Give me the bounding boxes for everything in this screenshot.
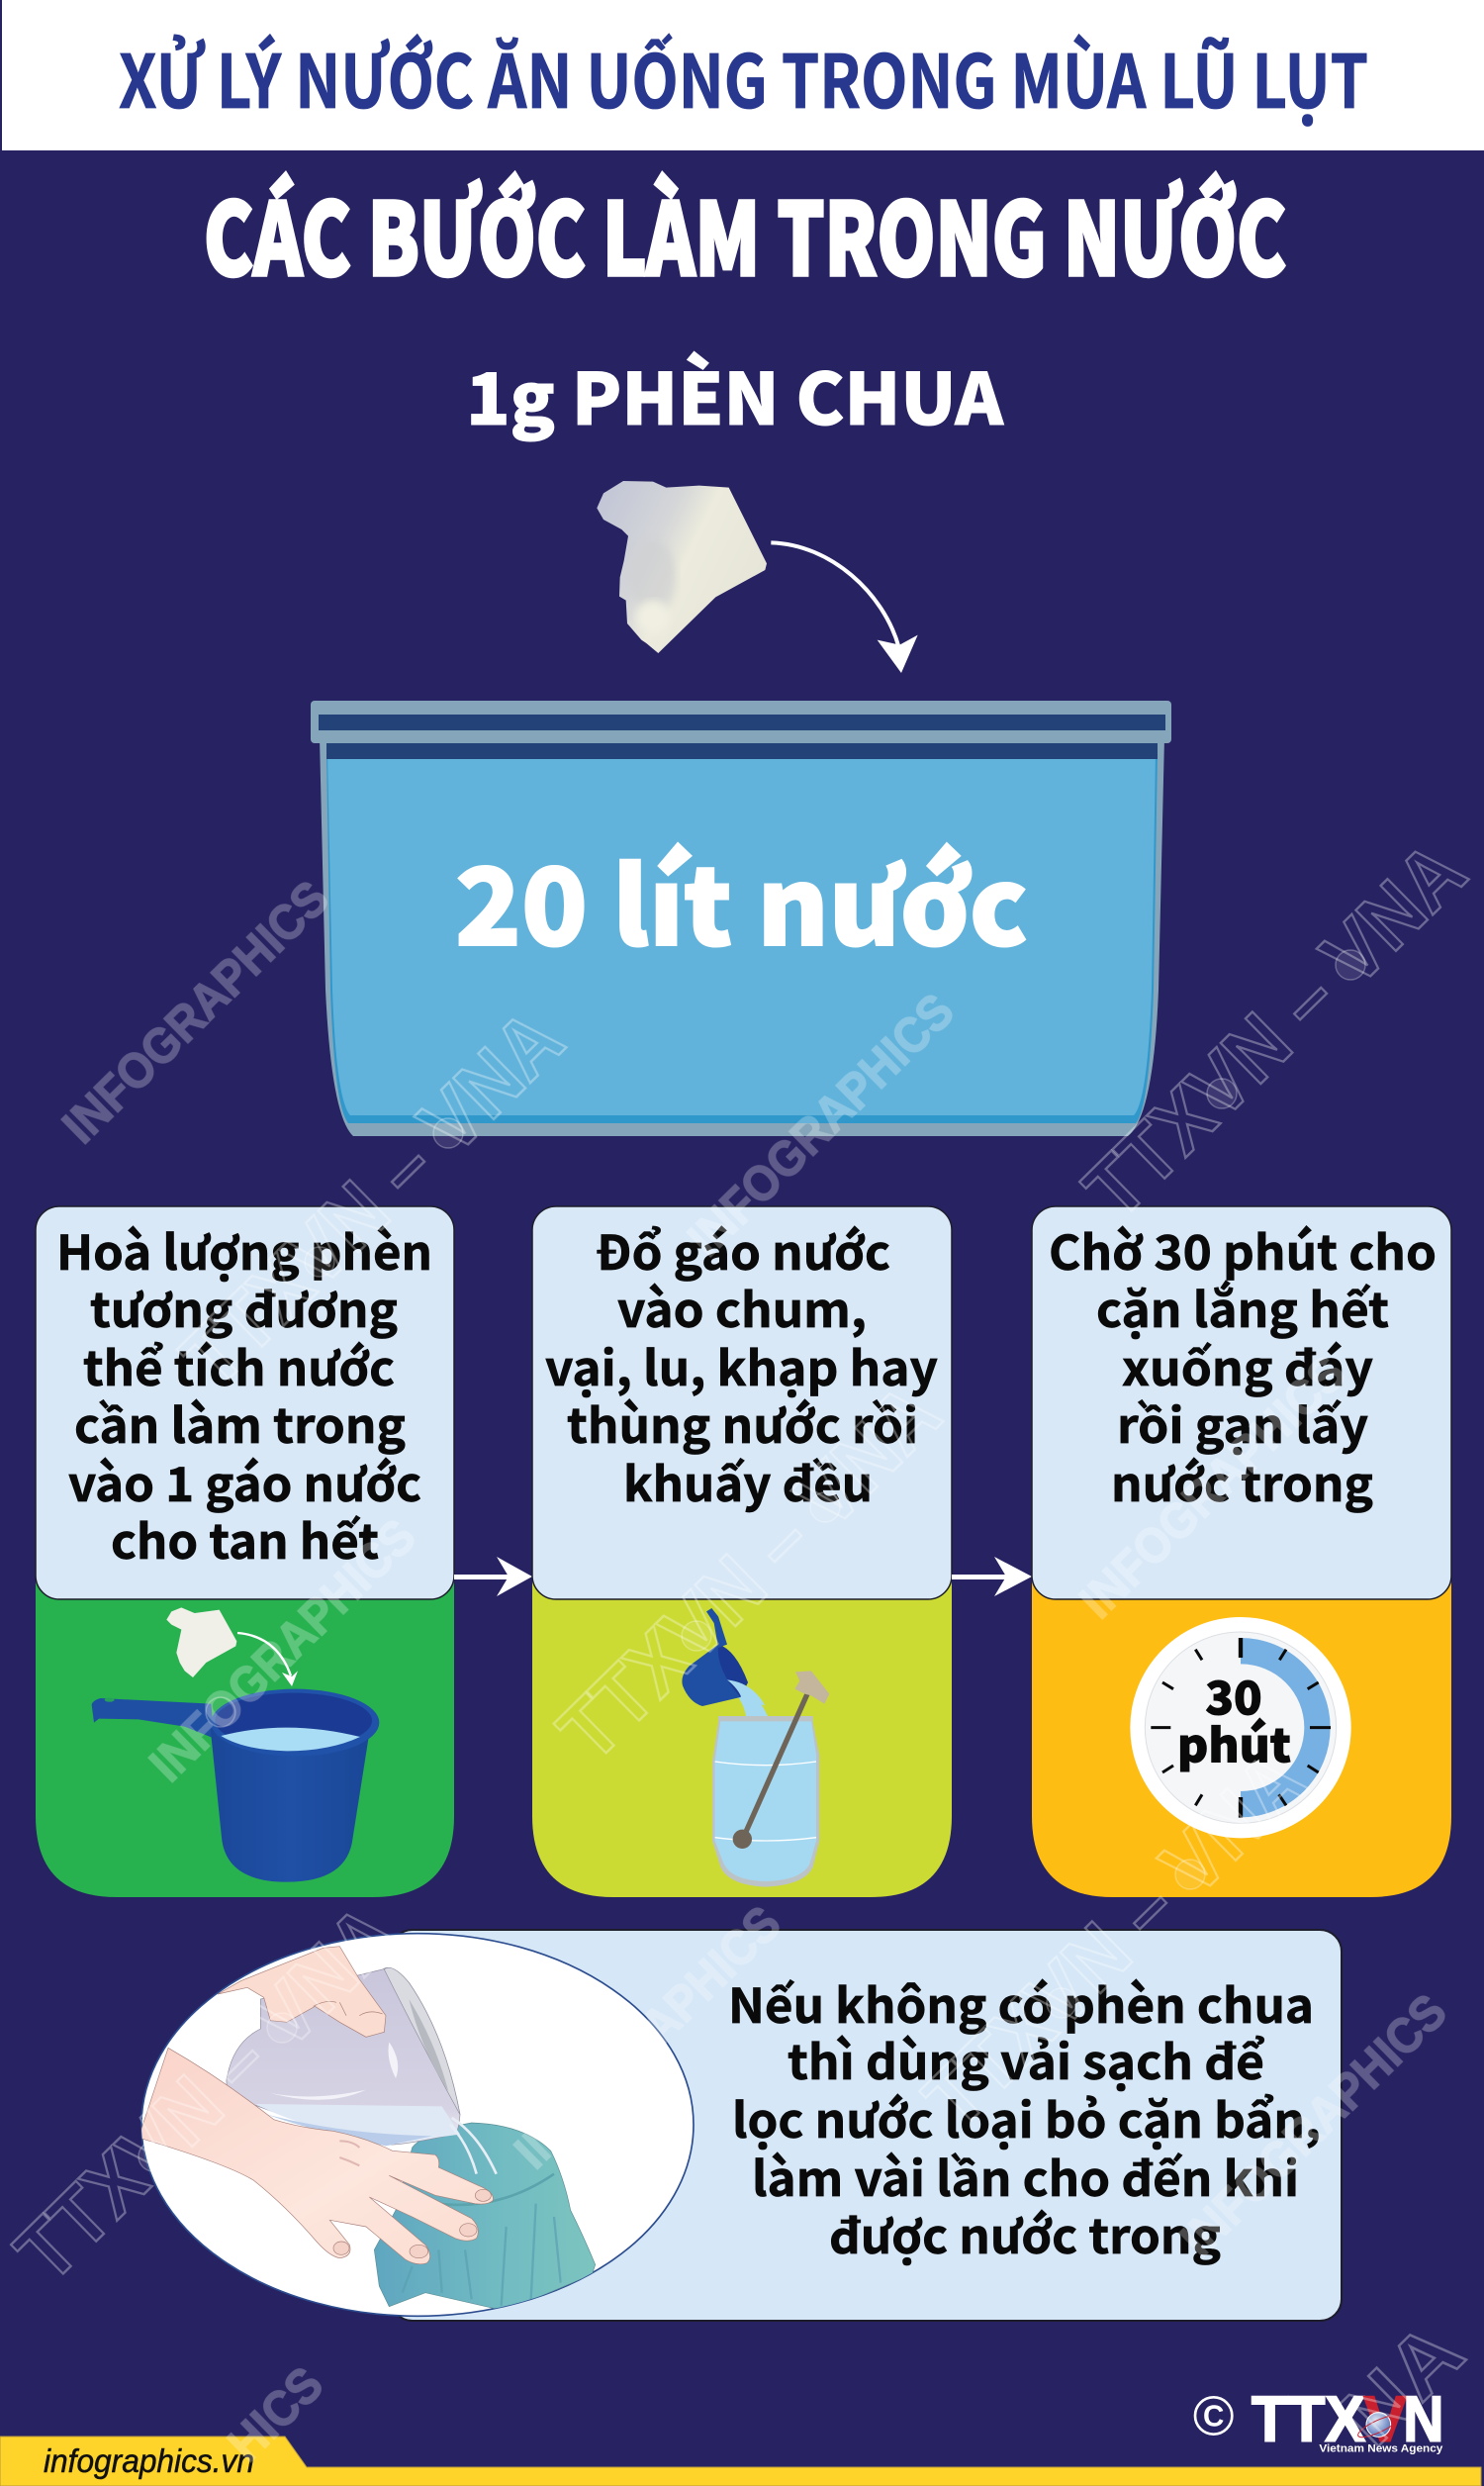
step 2 text: vào chum, [617,1272,867,1341]
icon: 30 minute clock [1130,1617,1352,1840]
icon: 30 minute clock: 30 [1205,1662,1262,1728]
icon: water scoop with alum [92,1607,379,1882]
illustration: hands pouring water through cloth [139,1934,694,2316]
icon: alum rock [597,481,767,653]
tank: 20 litres of water [311,701,1171,1136]
step 1 text: cho tan hết [111,1503,379,1573]
watermarks: TTXVN – VNA [164,993,581,1404]
footer url: infographics.vn [44,2442,254,2479]
watermarks: INFOGRAPHICS [1169,1983,1457,2267]
step 1 text: cần làm trong [74,1387,406,1457]
logo: TTXVN: N [1403,2383,1443,2455]
alternative text: được nước trong [829,2198,1221,2267]
step 2 text: khuấy đều [623,1446,873,1515]
arrow: alum into water [771,542,918,673]
watermarks: INFOGRAPHICS [504,1895,791,2179]
watermarks: INFOGRAPHICS [1068,1345,1356,1629]
logo: TTXVN: C [1203,2400,1224,2434]
step 2 text: vại, lu, khạp hay [545,1330,938,1399]
step 3 text: xuống đáy [1122,1330,1373,1399]
watermarks: INFOGRAPHICS [677,983,965,1267]
alternative text: Nếu không có phèn chua [728,1967,1314,2037]
footer band [0,2437,1481,2486]
step 1 text: Hoà lượng phèn [56,1214,432,1284]
watermarks: TTXVN – VNA [0,1887,415,2299]
step 2 text: thùng nước rồi [567,1387,918,1457]
step 3 text: Chờ 30 phút cho [1049,1214,1437,1284]
panel: step 1 [36,1206,454,1897]
alternative text: lọc nước loại bỏ cặn bẩn, [732,2082,1321,2151]
step 3 text: cặn lắng hết [1096,1272,1389,1341]
panel: alternative cloth filtering [139,1930,1342,2321]
alternative text [728,1967,1321,2267]
step 1 text: tương đương [90,1272,398,1341]
arrow: step 2 to step 3 [952,1557,1032,1596]
logo: TTXVN: V [1363,2383,1407,2455]
tank: 20 litres of water: 20 lít nước [455,822,1028,977]
step 1 text: vào 1 gáo nước [68,1446,421,1515]
panel: step 3 [1032,1206,1451,1897]
step 2 text [545,1214,938,1515]
panel: step 2 [532,1206,952,1897]
watermarks [0,824,1483,2472]
alternative text: thì dùng vải sạch để [788,2024,1264,2093]
icon: pouring into water jar with stirring stick [682,1608,829,1887]
title banner [0,0,1484,150]
watermarks: TTXVN – VNA [906,1734,1323,2146]
logo: TTXVN [1195,2383,1443,2455]
step 2 text: Đổ gáo nước [596,1214,890,1284]
alternative text: làm vài lần cho đến khi [752,2141,1299,2210]
step 1 text: thể tích nước [83,1330,395,1399]
step 3 text: rồi gạn lấy [1117,1387,1368,1457]
logo: TTXVN: Vietnam News Agency [1319,2442,1442,2454]
step 3 text [1049,1214,1437,1515]
arrow: step 1 to step 2 [454,1557,532,1596]
step 1 text [56,1214,432,1573]
watermarks: INFOGRAPHICS [51,870,339,1154]
watermarks: NA [1322,2305,1480,2463]
label: 1g alum: 1g PHÈN CHUA [466,341,1005,445]
icon: 30 minute clock: phút [1177,1710,1291,1776]
logo: TTXVN: TTX [1252,2383,1365,2455]
watermarks: HICS [217,2356,333,2472]
watermarks: TTXVN – VNA [541,1367,958,1778]
watermarks: INFOGRAPHICS [139,1508,426,1792]
step 3 text: nước trong [1111,1446,1373,1515]
